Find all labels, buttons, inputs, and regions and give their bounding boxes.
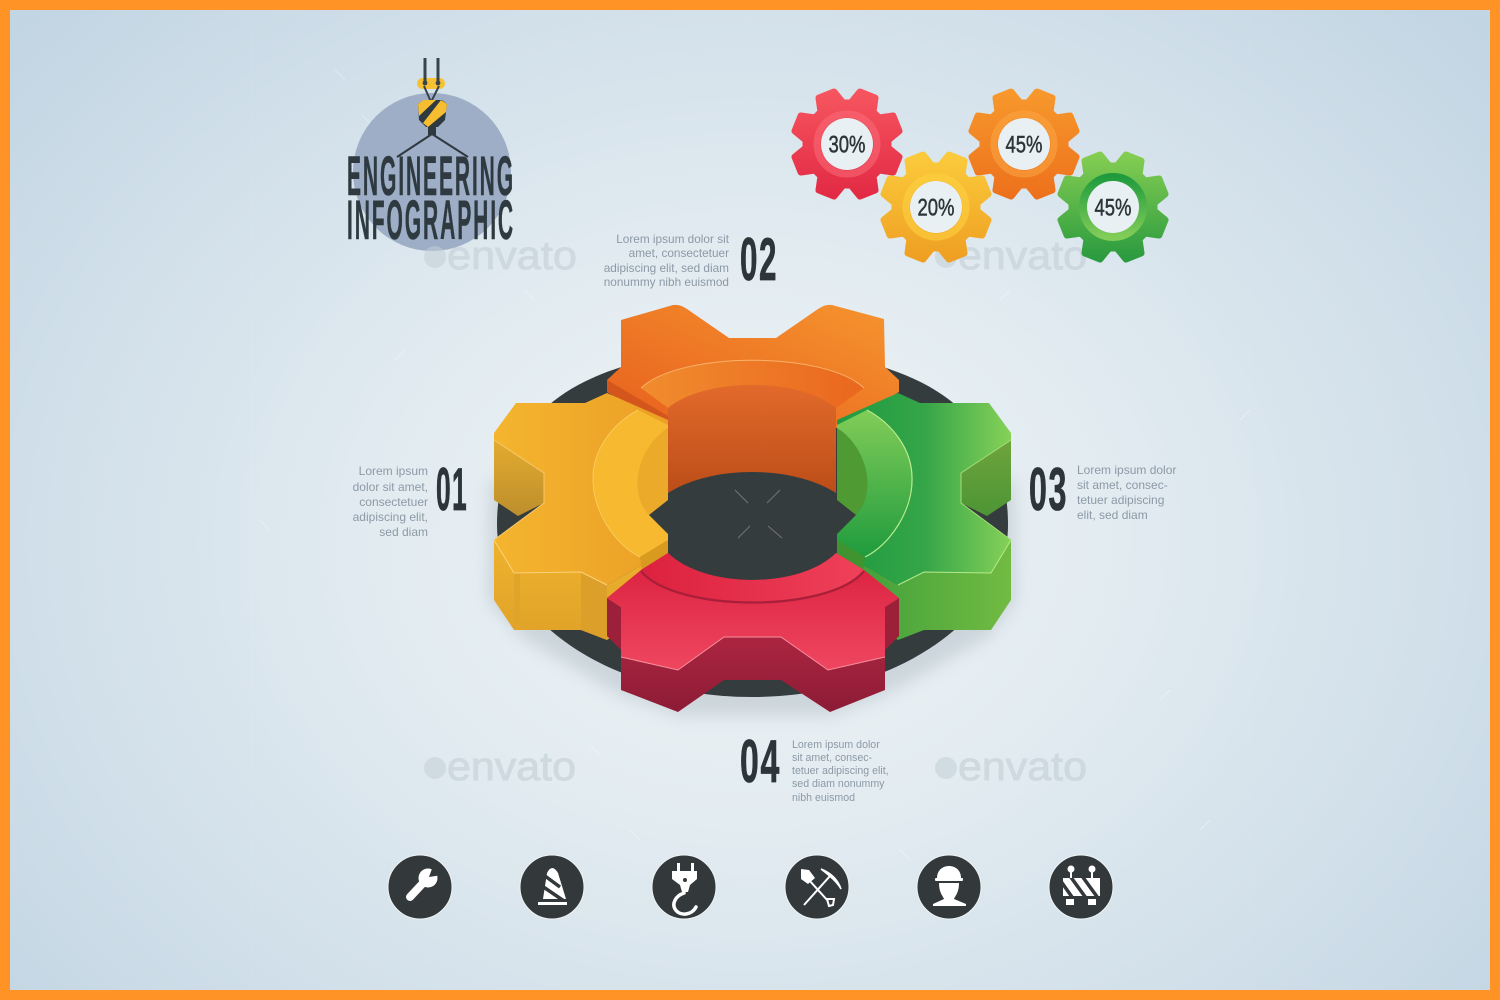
gear 45% orange: 45% <box>1006 132 1042 158</box>
label 02: amet, consectetuer <box>629 246 729 260</box>
gear 20%: 20% <box>918 194 954 222</box>
icon: wrench <box>388 855 452 919</box>
watermarks: envato <box>958 745 1087 789</box>
gear 45% green <box>1061 155 1165 259</box>
label 01: dolor sit amet, <box>353 480 428 494</box>
label 03 <box>1029 456 1176 523</box>
gear 30%: 30% <box>828 132 866 158</box>
icon row <box>388 855 1113 919</box>
label 02 <box>604 226 778 293</box>
watermarks <box>424 234 1087 789</box>
infographic canvas: ENGINEERING <box>347 144 515 207</box>
label 04: Lorem ipsum dolor <box>792 739 880 751</box>
watermarks: envato <box>447 745 576 789</box>
logo: crane hook and title <box>347 58 515 251</box>
icon: traffic cone <box>520 855 584 919</box>
label 02: adipiscing elit, sed diam <box>604 261 729 275</box>
label 02: nonummy nibh euismod <box>604 275 729 289</box>
dark base disc <box>497 350 1008 697</box>
label 04: tetuer adipiscing elit, <box>792 765 889 777</box>
icon: crane hook plug <box>652 855 716 919</box>
segment 02: orange <box>607 305 899 505</box>
label 04 <box>740 728 889 804</box>
label 03: sit amet, consec- <box>1077 478 1168 492</box>
label 03: tetuer adipiscing <box>1077 493 1164 507</box>
infographic canvas: 01 <box>436 456 468 523</box>
label 03: 03 <box>1029 456 1068 523</box>
label 03: elit, sed diam <box>1077 508 1148 522</box>
segment 01: yellow <box>494 393 668 640</box>
label 02: 02 <box>740 226 778 293</box>
central segmented gear <box>488 305 1016 716</box>
watermarks: envato <box>447 234 577 278</box>
label 04: nibh euismod <box>792 792 855 804</box>
watermarks: envato <box>958 234 1087 278</box>
icon: crane hook <box>397 58 468 157</box>
label 04: 04 <box>740 728 781 795</box>
gear shadow <box>488 480 1016 716</box>
infographic canvas: INFOGRAPHIC <box>347 188 515 251</box>
centre hole <box>646 472 858 580</box>
title <box>347 144 515 251</box>
icon: miner helmet <box>917 855 981 919</box>
gear 45% orange <box>972 92 1076 196</box>
segment 04: red <box>607 553 899 712</box>
icon: road barrier <box>1049 855 1113 919</box>
logo circle <box>353 93 511 251</box>
segment 03: green <box>837 393 1011 640</box>
label 01: sed diam <box>379 525 428 539</box>
label 04: sit amet, consec- <box>792 752 873 764</box>
label 03: Lorem ipsum dolor <box>1077 463 1176 477</box>
label 01: adipiscing elit, <box>353 510 428 524</box>
label 04: sed diam nonummy <box>792 778 885 790</box>
icon: shovel and pick <box>785 855 849 919</box>
label 02: Lorem ipsum dolor sit <box>616 232 730 246</box>
label 01 <box>353 456 468 539</box>
label 01: consectetuer <box>359 495 428 509</box>
gear 30% <box>795 92 899 196</box>
small percentage gears <box>795 92 1165 259</box>
gear 45% green: 45% <box>1094 194 1132 222</box>
gear 20% <box>884 155 988 259</box>
label 01: Lorem ipsum <box>359 464 428 478</box>
